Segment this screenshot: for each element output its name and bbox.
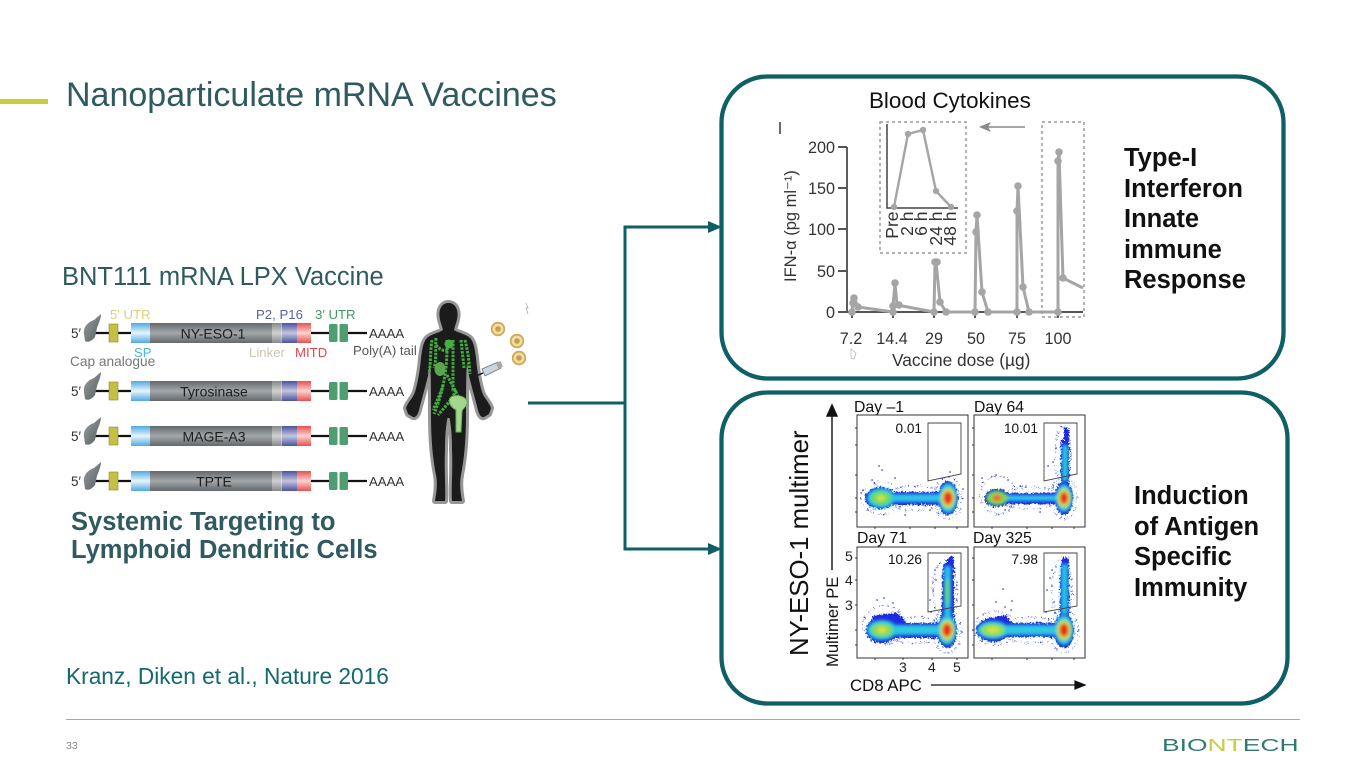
construct row: Tyrosinase: [71, 372, 404, 401]
line chart: IFN-alpha by dose: 7.2: [840, 330, 862, 348]
flow plot: Day 71: Day 71: [857, 530, 907, 547]
x axis arrow: [931, 681, 1085, 689]
vaccine heading: BNT111 mRNA LPX Vaccine: [62, 263, 384, 291]
accent bar: [0, 99, 48, 104]
arrow: zoom direction: [986, 126, 1025, 128]
page number: 33: [66, 740, 78, 752]
callout: type-I interferon: immune: [1124, 236, 1222, 264]
y axis label: NY-ESO-1 multimer: NY-ESO-1 multimer: [786, 430, 814, 656]
icon: human body with lymphoid system: [406, 303, 528, 501]
line chart: IFN-alpha by dose: Vaccine dose (µg): [892, 350, 1030, 370]
line chart: IFN-alpha by dose: 100: [1044, 330, 1072, 348]
flow plot: Day 325: 7.98: [1012, 552, 1038, 567]
construct labels: Cap analogue: [70, 354, 155, 369]
callout: antigen specific immunity: Specific: [1134, 543, 1232, 571]
citation: Kranz, Diken et al., Nature 2016: [66, 663, 389, 689]
inset: dashed selection and time course: [880, 122, 1084, 317]
y axis label: Multimer PE: Multimer PE: [823, 577, 842, 667]
inset: dashed selection and time course: 6 h: [911, 212, 931, 236]
construct row: MAGE-A3: MAGE-A3: [182, 428, 246, 444]
construct row: NY-ESO-1: 5′: [71, 326, 82, 341]
flow plot: Day 64: 10.01: [1004, 421, 1038, 436]
inset: dashed selection and time course: Pre: [882, 212, 902, 239]
flow plot: Day 71: 3: [845, 597, 853, 613]
construct labels: 3′ UTR: [315, 307, 356, 322]
construct labels: MITD: [295, 345, 327, 360]
flow plot: Day 71: 3: [899, 659, 907, 675]
construct labels: Poly(A) tail: [353, 343, 417, 358]
construct labels: P2, P16: [256, 307, 303, 322]
inset: dashed selection and time course: 2 h: [897, 212, 917, 236]
line chart: IFN-alpha by dose: 14.4: [876, 330, 908, 348]
construct row: NY-ESO-1: AAAA: [369, 326, 404, 341]
flow plot: Day 64: Day 64: [974, 399, 1024, 416]
callout: type-I interferon: Innate: [1124, 205, 1199, 233]
callout: type-I interferon: Interferon: [1124, 175, 1243, 203]
construct row: MAGE-A3: [71, 417, 404, 446]
construct row: Tyrosinase: Tyrosinase: [180, 384, 248, 400]
construct row: NY-ESO-1: [71, 314, 404, 343]
line chart: IFN-alpha by dose: 75: [1008, 330, 1026, 348]
icon: dendritic cells: [492, 323, 525, 364]
title: Nanoparticulate mRNA Vaccines: [66, 76, 557, 114]
panel: antigen specific immunity: [722, 392, 1288, 704]
construct row: NY-ESO-1: NY-ESO-1: [181, 326, 246, 342]
line chart: IFN-alpha by dose: IFN-α (pg ml⁻¹): [782, 170, 800, 282]
flow plot: Day 71: 10.26: [888, 552, 922, 567]
callout: antigen specific immunity: Immunity: [1134, 574, 1248, 602]
construct row: TPTE: TPTE: [196, 474, 232, 490]
callout: type-I interferon: Type-I: [1124, 144, 1197, 172]
flow plot: Day 71: 4: [928, 659, 936, 675]
construct labels: 5′ UTR: [110, 307, 151, 322]
subheading: systemic targeting: Systemic Targeting to: [71, 508, 336, 536]
line chart: IFN-alpha by dose: 200: [808, 139, 835, 157]
y axis arrow: [827, 405, 837, 570]
x axis label: CD8 APC: CD8 APC: [850, 676, 922, 695]
construct row: Tyrosinase: 5′: [71, 384, 82, 399]
logo: BioNTech: BIONTECH: [1162, 735, 1299, 755]
line chart: IFN-alpha by dose: 100: [808, 221, 835, 239]
panel: blood cytokines: [722, 76, 1284, 378]
construct row: TPTE: [71, 462, 404, 491]
construct row: TPTE: 5′: [71, 474, 82, 489]
construct row: MAGE-A3: AAAA: [369, 429, 404, 444]
icon: syringe: [476, 361, 503, 376]
construct row: Tyrosinase: AAAA: [369, 384, 404, 399]
line chart: IFN-alpha by dose: 50: [967, 330, 985, 348]
line chart: IFN-alpha by dose: 0: [826, 304, 835, 322]
mRNA construct diagram: [70, 307, 417, 491]
construct row: MAGE-A3: 5′: [71, 429, 82, 444]
line chart: IFN-alpha by dose: [780, 122, 1083, 370]
inset: dashed selection and time course: 48 h: [940, 212, 960, 246]
flow plot: Day 71: 5: [953, 659, 961, 675]
callout: antigen specific immunity: Induction: [1134, 482, 1249, 510]
flow plot: Day 325: Day 325: [973, 530, 1032, 547]
line chart: IFN-alpha by dose: 50: [817, 263, 835, 281]
flow plot: Day 64: [972, 399, 1085, 529]
flow plot: Day 71: [845, 530, 968, 675]
construct labels: [70, 307, 417, 369]
line chart: IFN-alpha by dose: 29: [925, 330, 943, 348]
connector arrows: [528, 221, 722, 555]
line chart: IFN-alpha by dose: 150: [808, 180, 835, 198]
callout: antigen specific immunity: of Antigen: [1134, 513, 1259, 541]
chart heading: Blood Cytokines: [869, 88, 1031, 113]
flow plot: Day 71: 4: [845, 572, 853, 588]
flow plot: Day -1: Day –1: [854, 399, 904, 416]
flow plot: Day -1: 0.01: [896, 421, 922, 436]
construct row: TPTE: AAAA: [369, 474, 404, 489]
callout: type-I interferon: Response: [1124, 266, 1246, 294]
flow plot: Day 325: [972, 530, 1085, 660]
construct labels: SP: [134, 345, 152, 360]
flow plot: Day -1: [854, 399, 968, 529]
flow plot: Day 71: 5: [845, 548, 853, 564]
inset: dashed selection and time course: 24 h: [926, 212, 946, 246]
construct labels: Linker: [249, 345, 286, 360]
subheading: systemic targeting: Lymphoid Dendritic Cells: [71, 536, 378, 564]
